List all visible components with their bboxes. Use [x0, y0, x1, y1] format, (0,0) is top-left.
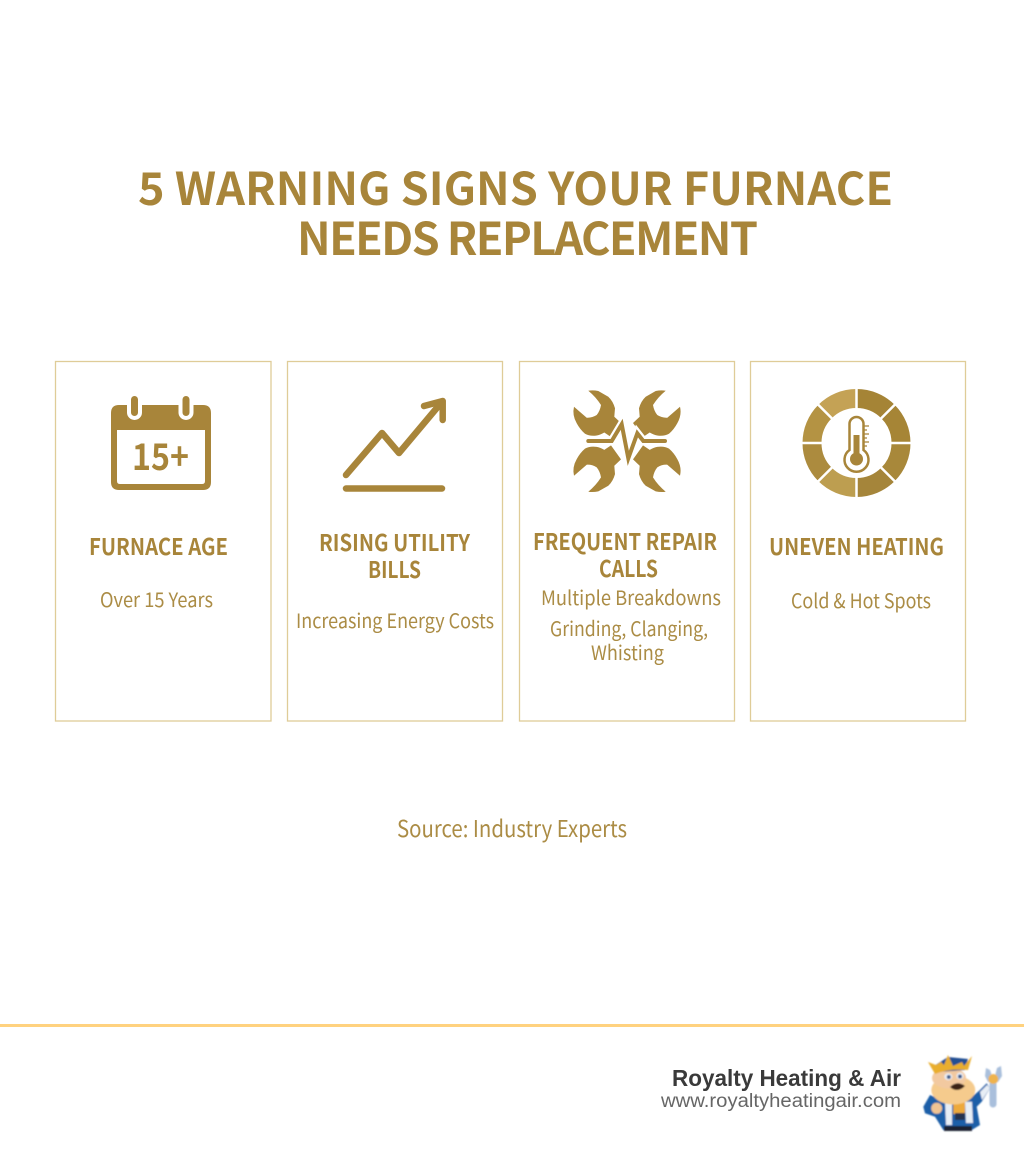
panel: rising utility bills: [288, 362, 502, 721]
footer brand text: www.royaltyheatingair.com: [660, 1091, 901, 1112]
title: [138, 153, 893, 268]
panel: uneven heating: [750, 362, 966, 721]
heading: uneven heating: UNEVEN HEATING: [769, 528, 944, 562]
panel: frequent repair calls: [520, 362, 734, 721]
footer divider: [0, 1024, 1024, 1027]
heading: rising utility bills: [319, 524, 471, 585]
icon: calendar 15+: [111, 393, 211, 490]
text: over 15 years: Over 15 Years: [100, 584, 213, 613]
source note: Source: Industry Experts: [397, 810, 627, 844]
footer brand text: [660, 1065, 901, 1112]
heading: rising utility bills: RISING UTILITY: [319, 524, 471, 558]
footer brand text: Royalty Heating & Air: [672, 1065, 901, 1091]
text: multiple breakdowns: Multiple Breakdowns: [541, 582, 721, 611]
text: grinding, clanging, whisting: [550, 613, 708, 666]
text: increasing energy costs: Increasing Energy Costs: [296, 605, 494, 634]
heading: frequent repair calls: CALLS: [599, 550, 658, 584]
heading: furnace age: FURNACE AGE: [89, 528, 228, 562]
text: grinding, clanging, whisting: Whisting: [591, 637, 664, 666]
text: cold and hot spots: Cold & Hot Spots: [791, 585, 931, 614]
icon: calendar 15+: 15+: [132, 427, 189, 481]
text: grinding, clanging, whisting: Grinding, Clanging,: [550, 613, 708, 642]
title: 5 WARNING SIGNS YOUR FURNACE: [138, 153, 893, 218]
icon: king mascot: [923, 1055, 1002, 1131]
icon: crossed wrenches: [573, 390, 681, 492]
icon: rising line chart: [346, 401, 443, 488]
icon: thermometer ring: [794, 380, 919, 506]
heading: frequent repair calls: FREQUENT REPAIR: [533, 523, 717, 557]
panel: furnace age: [56, 362, 271, 721]
heading: frequent repair calls: [533, 523, 717, 584]
heading: rising utility bills: BILLS: [368, 551, 421, 585]
title: NEEDS REPLACEMENT: [297, 203, 758, 268]
